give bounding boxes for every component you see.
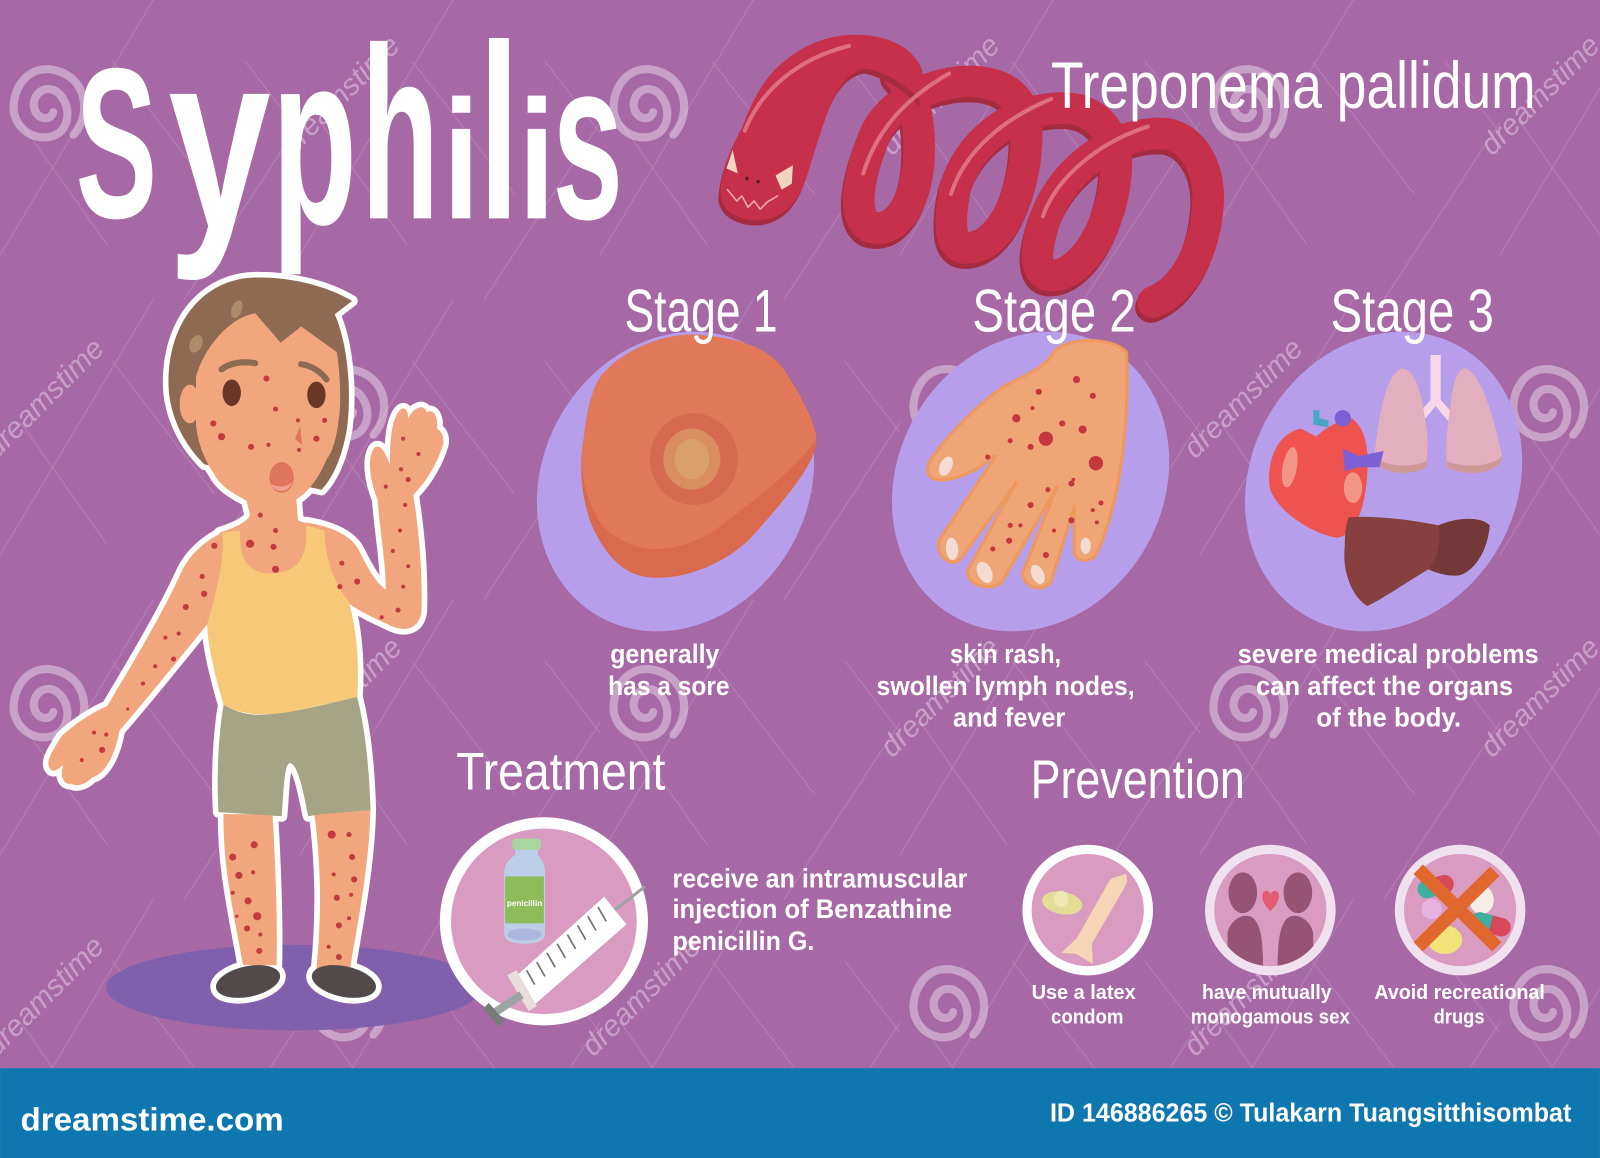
watermark pattern: dreamstime — [1177, 930, 1310, 1062]
footer bar — [0, 1068, 1600, 1158]
prevention label: condom: condom — [1051, 1006, 1123, 1028]
oval backdrop — [483, 281, 868, 682]
treatment description: receive an intramuscular — [672, 864, 967, 894]
watermark pattern: dreamstime — [575, 332, 708, 465]
stage 2 description: skin rash, — [950, 639, 1061, 669]
face — [196, 313, 340, 506]
icon: crossed-out recreational drugs — [1395, 845, 1525, 975]
prevention label: monogamy: monogamous sex — [1191, 1006, 1351, 1028]
rash spots — [80, 375, 420, 960]
prevention label: condom: Use a latex — [1032, 982, 1136, 1004]
vial: penicillin — [507, 899, 542, 908]
stage 1 description: generally — [610, 639, 720, 669]
icon: condom — [1022, 845, 1153, 975]
stage 2 description: and fever — [953, 702, 1065, 732]
footer logo: dreamstime.com — [21, 1100, 284, 1137]
ground shadow — [106, 945, 482, 1030]
treatment description: injection of Benzathine — [672, 894, 952, 924]
prevention label: drugs: drugs — [1434, 1006, 1485, 1028]
watermark pattern: dreamstime — [274, 29, 407, 162]
stage headings — [625, 278, 1494, 345]
prevention label: condom — [1032, 982, 1136, 1028]
stage 3 description: can affect the organs — [1256, 671, 1513, 701]
white sticker outline — [48, 277, 443, 1003]
title: l — [479, 0, 519, 272]
prevention label: drugs: Avoid recreational — [1374, 982, 1545, 1004]
stage headings: Stage 2 — [972, 278, 1136, 345]
stage 2 panel — [838, 281, 1223, 682]
rash hand — [928, 341, 1127, 588]
lungs — [1374, 355, 1502, 473]
skin with sore — [581, 335, 816, 578]
title: s — [553, 14, 623, 266]
worm highlights — [745, 46, 1148, 216]
body fills — [48, 407, 443, 969]
watermark pattern: dreamstime — [575, 930, 708, 1062]
title — [76, 0, 623, 281]
icon: treponema pallidum bacterium — [718, 35, 1208, 307]
worm head — [720, 35, 923, 220]
stage 2 description: swollen lymph nodes, — [877, 671, 1135, 701]
tank top — [207, 525, 358, 715]
heading: Treatment: Treatment — [456, 743, 666, 802]
stage 3 description: of the body. — [1316, 702, 1461, 732]
title: i — [518, 67, 555, 255]
shorts — [218, 697, 370, 816]
character: boy with rash — [48, 277, 482, 1030]
treatment description: penicillin G. — [672, 926, 814, 956]
facial features — [187, 299, 327, 493]
oval backdrop — [1191, 281, 1576, 682]
prevention label: monogamy: have mutually — [1202, 982, 1332, 1004]
stage 3 description — [1238, 639, 1539, 732]
syringe — [483, 887, 645, 1026]
stage 3 panel — [1191, 281, 1576, 682]
title: i — [443, 67, 480, 255]
prevention label: drugs — [1374, 982, 1545, 1028]
stage 1 description — [608, 639, 730, 701]
watermark pattern: dreamstime — [874, 29, 1006, 162]
title: p — [272, 4, 357, 276]
stage 1 panel — [483, 281, 868, 682]
stage 3 description: severe medical problems — [1238, 639, 1539, 669]
stage 1 description: has a sore — [608, 671, 730, 701]
shoes — [213, 960, 379, 1003]
title: h — [361, 0, 439, 271]
vial — [504, 839, 545, 944]
watermark pattern: dreamstime — [874, 631, 1006, 764]
icon: mutually monogamous couple — [1205, 845, 1336, 979]
prevention label: monogamy — [1191, 982, 1351, 1028]
stage headings: Stage 1 — [625, 278, 778, 345]
liver — [1344, 517, 1490, 606]
oval backdrop — [838, 281, 1223, 682]
hair — [168, 277, 352, 490]
watermark pattern: dreamstime — [1177, 332, 1310, 465]
stage headings: Stage 3 — [1331, 278, 1494, 345]
icon: penicillin vial and syringe — [440, 817, 648, 1026]
title: y — [168, 0, 271, 281]
ear — [180, 385, 200, 423]
stage 2 description — [877, 639, 1135, 732]
heart — [1269, 410, 1384, 538]
title: S — [76, 23, 157, 263]
watermark pattern: dreamstime — [276, 631, 409, 764]
footer credit: ID 146886265 © Tulakarn Tuangsitthisombat — [1050, 1099, 1572, 1127]
heading: Prevention: Prevention — [1031, 748, 1245, 810]
treatment description — [672, 864, 967, 956]
